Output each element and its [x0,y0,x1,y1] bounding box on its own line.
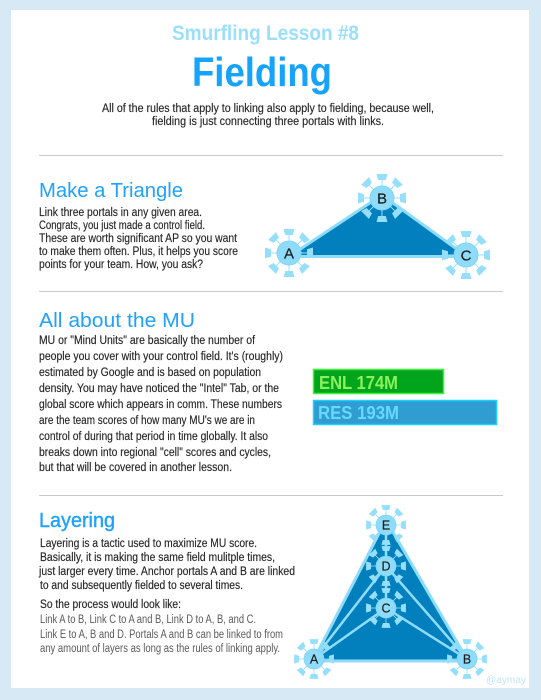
text: layering: to and subsequently fielded to several times. [40,580,243,592]
portal A: A [284,246,294,262]
text: all about the MU: but that will be covered in another lesson. [39,462,232,474]
text: layering [38,538,295,611]
text: make a triangle: These are worth significant AP so you want [39,233,238,245]
bar: ENL score: ENL 174M [319,373,398,393]
text: all about the MU: MU or "Mind Units" are basically the number of [39,335,256,347]
text: all about the MU: global score which appears in comm. These numbers [39,399,282,411]
text: layering process [40,614,283,655]
credit: @aymay [486,675,526,686]
text: all about the MU: control of during that period in time globally. It also [39,431,268,443]
text: all about the MU [39,335,283,474]
portal C [366,588,406,628]
heading: make a triangle: Make a Triangle [39,180,183,202]
text: all about the MU: estimated by Google and is based on population [39,367,261,379]
text: layering: just larger every time. Anchor portals A and B are linked [38,566,295,578]
portal B [358,174,406,222]
bar: RES score: RES 193M [318,403,399,423]
portal A [294,639,334,679]
portal A: A [310,653,319,667]
text: all about the MU: are the team scores of how many MU's we are in [39,415,255,427]
intro text: All of the rules that apply to linking also apply to fielding, because well, [102,103,434,115]
text: make a triangle: Congrats, you just made a control field. [39,220,205,232]
portal C: C [382,602,391,616]
title: Fielding [192,49,332,95]
text: layering: So the process would look like: [40,599,181,611]
text: all about the MU: people you cover with your control field. It's (roughly) [39,351,283,363]
heading: all about the MU: All about the MU [39,310,195,332]
bar: ENL score [314,370,444,394]
portal B: B [463,653,471,667]
text: layering process: any amount of layers as long as the rules of linking apply. [40,643,280,655]
portal D [366,546,406,586]
text: layering process: Link A to B, Link C to A and B, Link D to A, B, and C. [40,614,256,626]
text: make a triangle: to make them often. Plus, it helps you score [39,246,238,258]
diagram: triangle field [265,174,490,279]
text: make a triangle: points for your team. How, you ask? [39,259,203,271]
text: make a triangle: Link three portals in any given area. [39,207,202,219]
text: all about the MU: breaks down into regional "cell" scores and cycles, [39,447,271,459]
text: make a triangle [39,207,238,271]
text: layering: Basically, it is making the same field mulitple times, [40,552,275,564]
portal B: B [377,190,387,208]
text: all about the MU: density. You may have noticed the "Intel" Tab, or the [39,383,279,395]
heading: layering: Layering [39,510,115,532]
portal D: D [382,560,391,574]
portal C [442,231,490,279]
intro text: fielding is just connecting three portals with links. [152,116,384,128]
bar: RES score [314,400,496,424]
text: layering: Layering is a tactic used to maximize MU score. [40,538,257,550]
intro text [102,103,434,128]
text: layering process: Link E to A, B and D. Portals A and B can be linked to from [40,629,283,641]
portal E [366,505,406,545]
portal B [447,639,487,679]
diagram: layered fields [294,505,487,679]
lesson label: Smurfling Lesson #8 [172,22,359,45]
portal A [265,229,313,277]
portal C: C [461,248,472,264]
portal E: E [382,519,390,533]
